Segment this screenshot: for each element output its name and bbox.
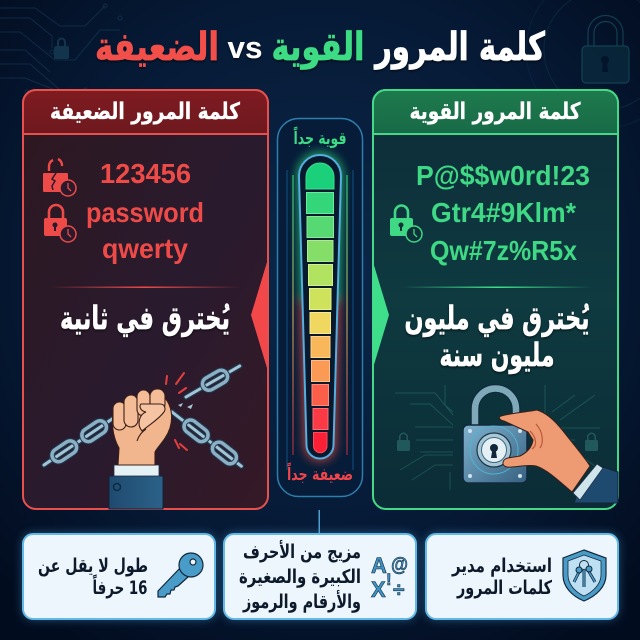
icon: shield with keys [563, 550, 606, 601]
card text: طول لا يقل عن [38, 555, 148, 577]
icon: symbols: ! [386, 570, 392, 589]
strong passwords list [416, 160, 590, 266]
weak passwords list: 123456 [100, 158, 191, 189]
icon: symbols: ÷ [393, 579, 405, 602]
weak passwords list: password [86, 197, 204, 228]
hand [499, 410, 590, 492]
panel header: weak: كلمة المرور الضعيفة [50, 99, 240, 125]
card text: الكبيرة والصغيرة [239, 566, 361, 588]
connector line [318, 510, 320, 533]
icon: symbols: @ [391, 554, 408, 576]
strong crack time [404, 299, 590, 374]
icon: symbols: X [371, 577, 386, 602]
card text: استخدام مدير [451, 555, 552, 577]
padlock body [463, 425, 527, 483]
card: mix of characters [224, 534, 416, 619]
weak passwords list [86, 158, 204, 264]
chain lower right [168, 407, 245, 471]
panel header: strong [373, 90, 618, 134]
card: length [23, 534, 215, 619]
icon: broken lock with clock [44, 159, 76, 196]
arrow: green pointer [373, 262, 389, 368]
icon: lock with clock [44, 205, 76, 242]
label: very weak: ضعيفة جداً [287, 461, 353, 485]
card text [239, 540, 361, 613]
card: password manager [426, 534, 618, 619]
icon: key [158, 553, 203, 597]
card text: 16 حرفاً [92, 574, 148, 599]
spark lines [166, 373, 187, 450]
meter segments [306, 163, 334, 453]
card text [451, 555, 553, 599]
panel: strength meter [278, 118, 362, 496]
strong passwords list: Qw#7z%R5x [430, 235, 577, 266]
chain upper right [183, 360, 243, 403]
strong passwords list: P@$$w0rd!23 [416, 160, 590, 191]
fist [112, 389, 172, 465]
panel: weak password [23, 90, 268, 509]
panel header: weak [23, 90, 268, 134]
icon: green lock with clock [390, 206, 422, 242]
title: vs [228, 30, 262, 65]
decoration: small locks [397, 432, 598, 451]
strong passwords list: Gtr4#9Klm* [431, 197, 576, 228]
title: القوية [272, 25, 364, 70]
decoration: circuit around lock [395, 385, 600, 490]
chain left [40, 413, 117, 470]
strong crack time: مليون سنة [440, 336, 554, 374]
chain fragments [178, 403, 193, 409]
meter glow [297, 152, 343, 461]
decoration: faint padlock top left [54, 38, 69, 59]
icon: symbols [371, 553, 408, 602]
sleeve [109, 476, 163, 509]
meter tube [299, 155, 341, 458]
card text [38, 555, 148, 599]
icon: symbols: A [371, 553, 387, 578]
weak crack time: يُخترق في ثانية [60, 299, 230, 337]
illustration: padlock held by hand [463, 388, 618, 503]
label: very strong: قوية جداً [293, 125, 346, 149]
decoration: circuit traces top left [0, 4, 122, 96]
title: الضعيفة [95, 25, 219, 70]
title: كلمة المرور [374, 25, 545, 70]
weak passwords list: qwerty [102, 233, 188, 264]
card text: كلمات المرور [456, 577, 553, 599]
illustration: fist breaking chain [40, 360, 245, 509]
decoration: faint padlock top right [526, 0, 640, 128]
arrow: red pointer [251, 262, 267, 368]
card text: والأرقام والرموز [242, 590, 361, 613]
cuff [114, 465, 159, 476]
panel: strong password [373, 90, 618, 509]
card text: مزيج من الأحرف [243, 540, 361, 563]
padlock shackle [475, 388, 516, 426]
title [95, 25, 545, 70]
panel header: strong: كلمة المرور القوية [410, 99, 581, 125]
sleeve [574, 465, 618, 503]
